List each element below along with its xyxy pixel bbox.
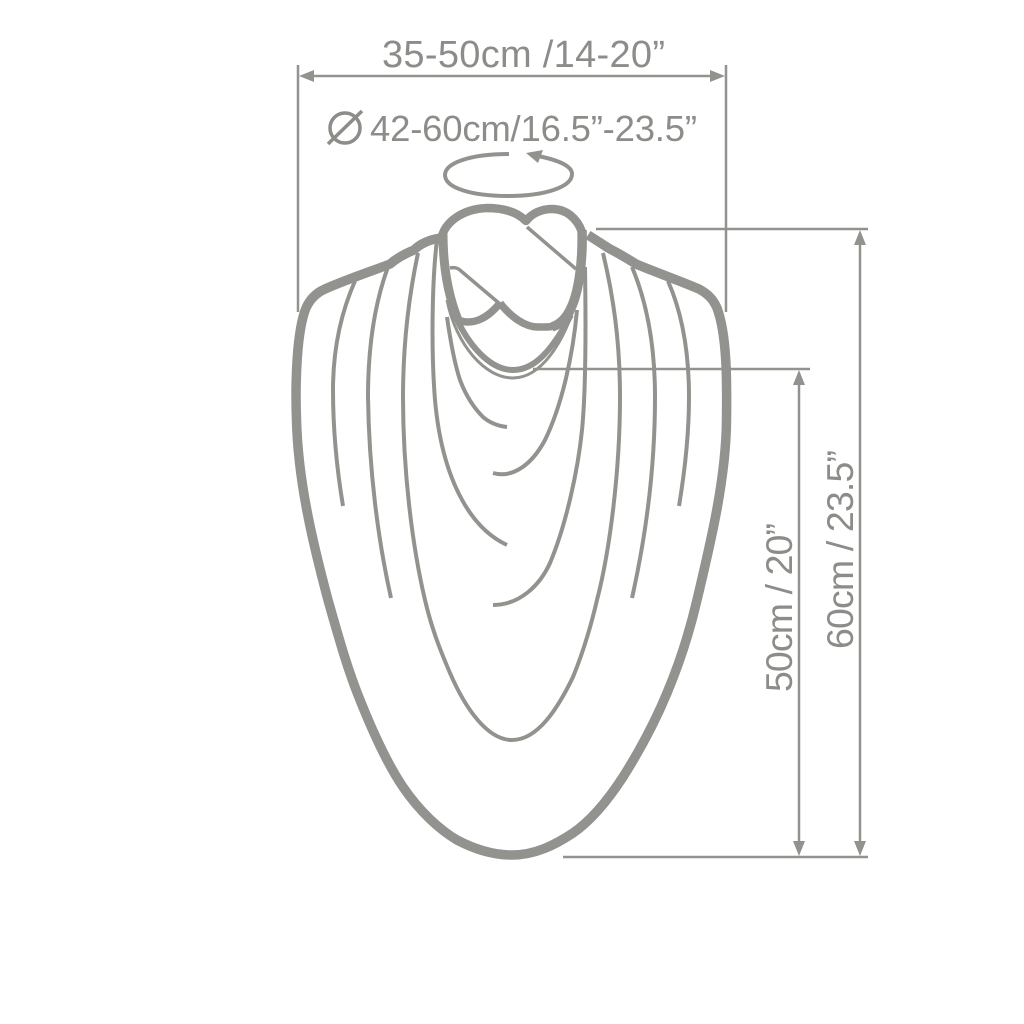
drape line ending mid right lower <box>493 267 586 605</box>
garment illustration <box>296 208 727 855</box>
collar fold left <box>458 303 500 322</box>
inner neck drape thin <box>447 295 578 378</box>
neck right edge <box>552 230 582 327</box>
fold crease right <box>527 227 576 269</box>
width label: 35-50cm /14-20” <box>382 34 665 76</box>
drape line far right <box>668 281 689 506</box>
60cm extension lines and arrow <box>596 229 868 856</box>
neck left edge <box>443 234 458 320</box>
drape line ending mid left upper <box>447 317 507 427</box>
neck opening top edge <box>442 208 582 236</box>
drape line ending mid right upper <box>493 310 577 474</box>
drape line ending mid left lower <box>433 240 507 545</box>
width dimension <box>298 34 726 312</box>
inner neck drape thick <box>455 315 571 370</box>
50cm label: 50cm / 20” <box>758 523 800 692</box>
outer cowl outline <box>296 235 727 855</box>
drape line far left <box>333 281 355 506</box>
collar fold right <box>500 303 557 327</box>
height dimension 50cm <box>533 369 868 857</box>
50cm extension lines and arrow <box>533 369 868 857</box>
height dimension 60cm <box>596 229 868 856</box>
circumference dimension <box>328 108 697 196</box>
long inner loop <box>403 253 620 740</box>
width extension lines and arrow <box>298 65 726 312</box>
drape line second left <box>368 267 391 598</box>
drape line second right <box>632 267 655 598</box>
circumference label: 42-60cm/16.5”-23.5” <box>370 108 697 149</box>
fold crease left <box>450 268 500 304</box>
60cm label: 60cm / 23.5” <box>819 450 861 649</box>
icon: rotation arrow <box>445 150 572 196</box>
icon: diameter symbol <box>328 111 362 144</box>
